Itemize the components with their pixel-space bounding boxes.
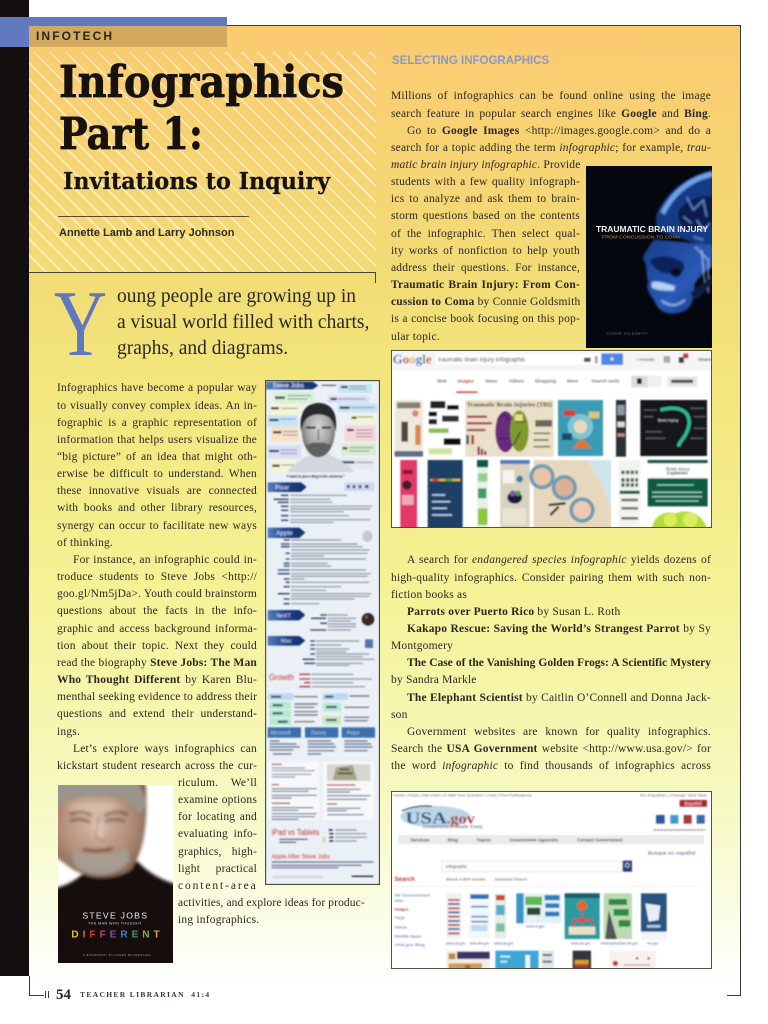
right column text: endangered species and government sites: by Sandra Markle xyxy=(391,674,477,686)
search sidebar menu: All Government xyxy=(395,893,431,898)
footer crop mark right xyxy=(727,995,741,996)
cranium xyxy=(656,170,713,248)
left column body text xyxy=(57,382,365,926)
image: usa.gov search screenshot: Español xyxy=(685,801,702,806)
right column text: selecting infographics: search feature in popular search engines like Google and Bing. xyxy=(391,108,711,120)
right column text: endangered species and government sites: The Elephant Scientist by Caitlin O’Connell and Donna Jack- xyxy=(407,692,711,704)
image: google image search screenshot: +Annette xyxy=(636,357,655,362)
left column body text: evaluating info- xyxy=(178,828,257,840)
right column text: selecting infographics: storm questions based on the contents xyxy=(391,210,580,222)
image: usa.gov search screenshot: Search xyxy=(395,877,415,883)
result thumbnails row 1 xyxy=(395,400,707,457)
right column text: endangered species and government sites: son xyxy=(391,709,408,721)
image: steve jobs book cover xyxy=(58,785,173,963)
infographic section: mac: Mac xyxy=(281,639,292,645)
left column body text: fographic is a graphic representation of xyxy=(57,417,257,429)
google nav tabs: Shopping xyxy=(535,379,556,384)
infographic section: pixar: Pixar xyxy=(275,484,289,491)
right column text: selecting infographics: of the infographic. Then select qual- xyxy=(391,228,580,240)
image: usa.gov search screenshot: En Español | Change Text Size xyxy=(640,793,708,798)
cover title: CONNIE GOLDSMITH xyxy=(607,331,647,335)
image: google image search screenshot: Share xyxy=(698,357,711,362)
left column body text: with books and other library resources, xyxy=(57,502,257,514)
infographic header: steve jobs: Steve Jobs xyxy=(273,383,304,390)
right column text: endangered species and government sites xyxy=(391,554,711,772)
search sidebar menu xyxy=(395,893,431,947)
page frame right rule xyxy=(740,25,741,996)
section tab: infotech xyxy=(29,26,227,47)
left column body text: read the biography Steve Jobs: The Man xyxy=(57,657,257,669)
byline rule xyxy=(58,216,249,217)
image: usa.gov search screenshot: infographic xyxy=(446,864,468,869)
left column body text: ing infographics. xyxy=(178,914,259,926)
image: google image search screenshot xyxy=(391,350,712,528)
infographic columns: microsoft, disney, pepsi: Microsoft xyxy=(270,730,291,736)
left column body text: graphic and access background informa- xyxy=(57,623,257,635)
infographic section: apple xyxy=(268,528,372,542)
left column body text: tion about their topic. Next they could xyxy=(57,640,257,652)
black sidebar xyxy=(0,0,29,976)
page number: 54 xyxy=(56,987,71,1003)
image search thumbnails: InfoGraphicData.nih.gov xyxy=(601,942,638,946)
book title: DIFFERENT xyxy=(71,929,160,940)
left column body text: Infographics have become a popular way xyxy=(57,382,257,394)
left column body text: these innovative visuals are connected xyxy=(57,485,257,497)
usa.gov navigation bar: Topics xyxy=(476,838,491,843)
right column text: endangered species and government sites: The Case of the Vanishing Golden Frogs: A Scientific Mystery xyxy=(407,657,711,669)
usa.gov logo: .gov xyxy=(446,811,475,827)
right column text: endangered species and government sites: high-quality infographics. Consider pairing them with such non- xyxy=(391,572,711,584)
cover title: FROM CONCUSSION TO COMA xyxy=(602,235,681,240)
image search thumbnails: ihs.gov xyxy=(648,942,659,946)
google nav tabs: Search tools xyxy=(591,379,620,384)
image: steve jobs infographic: “I want to put a ding in the universe.” xyxy=(286,474,345,478)
search sidebar menu: Videos xyxy=(395,924,407,929)
infographic section: next xyxy=(268,610,374,626)
left column body text: riculum. We’ll xyxy=(178,777,257,789)
left column body text: goo.gl/Nm5jDa>. Youth could brainstorm xyxy=(57,588,257,600)
drop cap: Y xyxy=(54,272,107,376)
right column text: endangered species and government sites: A search for endangered species infographic yields dozens of xyxy=(407,554,711,566)
search sidebar menu: Images xyxy=(395,906,409,911)
result thumbnails row 2: Brain Injury xyxy=(666,466,691,471)
infographic heading: ipad vs tablets: iPad vs Tablets xyxy=(272,828,319,837)
left column body text: information that helps users visualize the xyxy=(57,434,257,446)
right column text: endangered species and government sites: Kakapo Rescue: Saving the World’s Strangest Parrot by Sy xyxy=(407,623,711,635)
infographic header: steve jobs xyxy=(266,382,336,390)
page frame top rule xyxy=(29,25,741,26)
left column body text: Who Thought Different by Karen Blu- xyxy=(57,674,257,686)
infographic section: pixar xyxy=(268,482,374,492)
cover title xyxy=(596,224,708,335)
right column text: selecting infographics: Go to Google Images <http://images.google.com> and do a xyxy=(407,125,711,137)
google nav tabs: Images xyxy=(458,379,474,384)
byline: Annette Lamb and Larry Johnson xyxy=(59,227,234,239)
face and jaw xyxy=(643,239,713,314)
right column text: selecting infographics: ular topic. xyxy=(391,331,440,343)
right column text: endangered species and government sites: Search the USA Government website <http://www.usa.gov/> for xyxy=(391,743,711,755)
left column body text: questions and extend their understand- xyxy=(57,708,257,720)
right column text: selecting infographics xyxy=(391,90,711,343)
infographic columns: microsoft, disney, pepsi: Disney xyxy=(311,730,327,736)
google nav tabs: More xyxy=(567,379,579,384)
image search thumbnails: www.cdc.gov xyxy=(446,942,466,946)
right column text: selecting infographics: cussion to Coma by Connie Goldsmith xyxy=(391,296,580,308)
infographic section: mac xyxy=(268,636,373,648)
search sidebar menu: FAQs xyxy=(395,915,405,920)
lead paragraph: a visual world filled with charts, xyxy=(117,312,369,333)
left column body text: content-area xyxy=(178,880,258,892)
infographic heading: apple after steve jobs: Apple After Steve Jobs xyxy=(272,853,330,860)
left column body text: for locating and xyxy=(178,811,257,823)
image: usa.gov search screenshot: Home | FAQs | Site Index | E-Mail Your Question | Chat | Print Publications xyxy=(393,793,532,798)
infographic columns: microsoft, disney, pepsi xyxy=(268,727,375,738)
title xyxy=(59,57,344,160)
result thumbnails row 1: Brain Injury xyxy=(658,419,679,423)
subtitle: Invitations to Inquiry xyxy=(63,167,331,195)
striped title panel xyxy=(29,52,376,272)
left column body text: Let’s explore ways infographics can xyxy=(73,743,257,755)
google nav tabs: Web xyxy=(437,379,447,384)
usa.gov navigation bar: Blog xyxy=(448,838,458,843)
search sidebar menu: Sites xyxy=(395,898,404,903)
right column text: endangered species and government sites: the word infographic to find thousands of infographics across xyxy=(391,760,711,772)
infographic heading: growth: Growth xyxy=(269,672,294,682)
book title: A BIOGRAPHY BY KAREN BLUMENTHAL xyxy=(83,953,152,957)
right column text: selecting infographics: is a concise book focusing on this pop- xyxy=(391,313,580,325)
cover title: TRAUMATIC BRAIN INJURY xyxy=(596,224,708,234)
image search thumbnails: www.cdc.gov xyxy=(494,942,514,946)
google logo: Google xyxy=(393,352,432,367)
left column body text: light practical xyxy=(178,863,257,875)
usa.gov navigation bar: Services xyxy=(410,838,430,843)
right column text: selecting infographics: ity works of nonfiction to help youth xyxy=(391,245,580,257)
usa.gov logo: USA xyxy=(405,808,447,827)
search sidebar menu: Mobile Apps xyxy=(395,933,421,938)
left column body text: of thinking. xyxy=(57,537,113,549)
search sidebar menu: USA.gov Blog xyxy=(395,942,425,947)
image: usa.gov search screenshot: Busque en español xyxy=(648,851,695,856)
infographic section: apple: Apple xyxy=(276,530,293,537)
footer crop mark left xyxy=(29,976,44,996)
left column body text: synergy can occur to facilitate new ways xyxy=(57,520,257,532)
usa.gov navigation bar: Contact Government xyxy=(577,838,623,843)
footer tick xyxy=(45,991,49,998)
left column body text: “big picture” of an idea that might oth- xyxy=(57,451,257,463)
image search thumbnails xyxy=(446,893,667,969)
right column text: selecting infographics: Millions of infographics can be found online using the image xyxy=(391,90,711,102)
google nav tabs: Videos xyxy=(509,379,524,384)
lead paragraph: graphs, and diagrams. xyxy=(117,338,288,359)
result thumbnails row 2: Explained xyxy=(667,470,688,475)
right column text: selecting infographics: address their questions. For instance, xyxy=(391,262,580,274)
left column body text: to visually convey complex ideas. An in- xyxy=(57,400,257,412)
usa.gov logo xyxy=(400,806,484,829)
book title xyxy=(71,911,160,957)
image: usa.gov search screenshot: About 4,800 results xyxy=(446,877,485,882)
right column text: endangered species and government sites: fiction books as xyxy=(391,589,467,601)
lead paragraph: oung people are growing up in xyxy=(117,286,356,307)
section tab: infotech: INFOTECH xyxy=(36,29,114,43)
image search thumbnails: www.dhs.gov xyxy=(470,942,490,946)
image: traumatic brain injury book cover xyxy=(586,166,712,348)
book title: STEVE JOBS xyxy=(82,911,148,921)
infographic section: next: NeXT xyxy=(276,613,291,619)
right column text: selecting infographics: ics to analyze and ask them to brain- xyxy=(391,193,580,205)
result thumbnails row 2 xyxy=(400,460,708,528)
right column text: selecting infographics: students with a few quality infograph- xyxy=(391,176,580,188)
section heading: selecting infographics: SELECTING INFOGRAPHICS xyxy=(392,55,549,67)
infographic money photo xyxy=(327,764,370,781)
right column text: selecting infographics: Traumatic Brain Injury: From Con- xyxy=(391,279,580,291)
infographic portrait xyxy=(288,403,354,472)
lead paragraph xyxy=(117,286,369,359)
blue band xyxy=(0,17,227,47)
left column body text: questions about the facts in the info- xyxy=(57,605,257,617)
image: steve jobs infographic xyxy=(265,380,380,885)
usa.gov navigation bar: Government Agencies xyxy=(510,838,558,843)
left column body text: graphics, high- xyxy=(178,846,257,858)
google nav tabs xyxy=(437,379,620,384)
usa.gov navigation bar xyxy=(398,835,704,844)
left column body text: erwise be difficult to understand. When xyxy=(57,468,257,480)
header rule end tick xyxy=(375,272,376,283)
left column body text: activities, and explore ideas for produc- xyxy=(178,897,365,909)
left column body text: kickstart student research across the cur- xyxy=(57,760,257,772)
right column text: endangered species and government sites: Government websites are known for quality infographics. xyxy=(407,726,711,738)
google nav tabs: News xyxy=(485,379,498,384)
usa.gov logo: Government Made Easy xyxy=(423,824,484,829)
header bottom rule xyxy=(29,272,376,273)
search query: traumatic brain injury infographic xyxy=(438,358,525,364)
image: usa.gov search screenshot: Advanced Search xyxy=(495,877,527,882)
right column text: selecting infographics: matic brain injury infographic. Provide xyxy=(391,159,581,171)
image: usa.gov search screenshot xyxy=(391,791,712,969)
left column body text: troduce students to Steve Jobs <http:// xyxy=(57,571,257,583)
right column text: endangered species and government sites: Montgomery xyxy=(391,640,453,652)
footer running title: TEACHER LIBRARIAN 41:4 xyxy=(80,990,210,999)
right column text: endangered species and government sites: Parrots over Puerto Rico by Susan L. Roth xyxy=(407,606,620,618)
book title: THE MAN WHO THOUGHT xyxy=(88,922,142,926)
right column text: selecting infographics: search for a topic adding the term infographic; for example, trau- xyxy=(391,142,711,154)
image search thumbnails: www.ct.gov xyxy=(526,925,545,929)
left column body text: ings. xyxy=(57,726,80,738)
image search thumbnails: www.cdc.gov xyxy=(571,942,591,946)
left column body text: For instance, an infographic could in- xyxy=(73,554,257,566)
infographic columns: microsoft, disney, pepsi: Pepsi xyxy=(347,730,360,736)
left column body text: examine options xyxy=(178,794,257,806)
result thumbnails row 1: Traumatic Brain Injuries (TBI) xyxy=(467,401,552,408)
left column body text: menthal seeking evidence to address their xyxy=(57,691,257,703)
title: Part 1: xyxy=(59,109,203,160)
